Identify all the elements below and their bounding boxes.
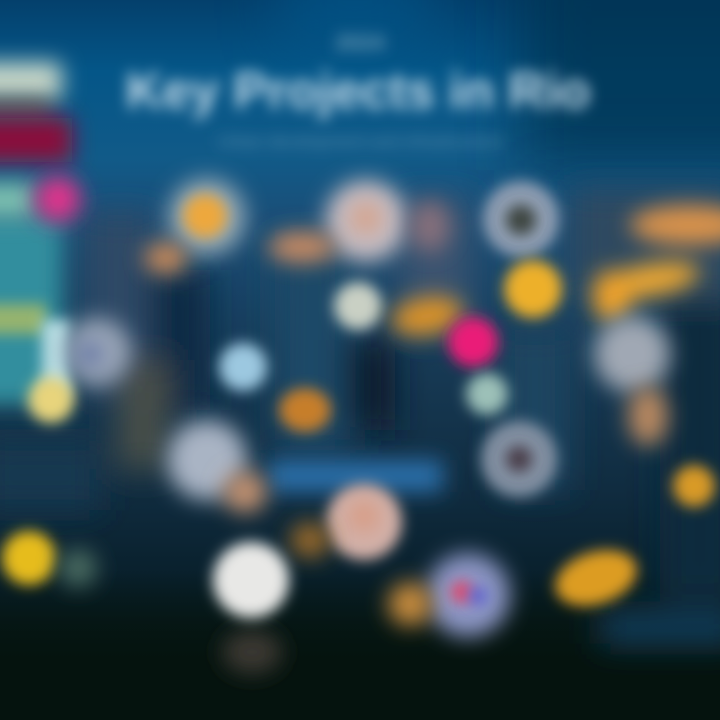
icon: orange small blob (279, 388, 331, 432)
icon: white glowing circle (213, 542, 289, 618)
tower green band (0, 304, 46, 334)
icon: multicolour badge (388, 553, 510, 637)
tower shaft (0, 215, 62, 405)
icon: magenta circle (448, 317, 498, 367)
dark shadow below white circle (222, 630, 282, 674)
tower neck (0, 100, 52, 118)
icon: dark ring badge (483, 181, 559, 257)
icon: pale teal circle (466, 373, 508, 415)
icon: yellow circle (28, 377, 74, 423)
icon: light blue circle (219, 343, 267, 391)
subtitle: Urban development and infrastructure (217, 132, 503, 151)
title: Key Projects in Rio (126, 62, 590, 119)
tower red band (0, 118, 72, 162)
tower teal collar (0, 182, 36, 218)
icon: gold ribbon lower right (548, 540, 644, 616)
icon: orange cluster top right (592, 205, 720, 322)
icon: grey ring (63, 318, 131, 386)
icon: dark ring badge lower (481, 421, 557, 497)
icon: orange badge with tail (144, 178, 246, 274)
icon: pale ring with peach tail (167, 420, 267, 513)
icon: gold small circle right (673, 465, 715, 507)
icon: small pale circle (334, 282, 382, 330)
heading (126, 30, 590, 151)
skyline: blurred buildings (0, 190, 720, 644)
tower at left (0, 62, 131, 423)
blue water band (268, 460, 443, 492)
small kicker above title: 2024 (336, 30, 385, 55)
tower top (0, 62, 62, 100)
icon: pink circle (35, 176, 81, 222)
icon: gold circle (504, 260, 562, 318)
icon: orange pill (388, 291, 466, 341)
tower light column (42, 320, 70, 396)
icon: peach badge with arm (268, 180, 450, 263)
icon: peach badge lower (290, 484, 402, 560)
icon: pale circle with orange tail (594, 316, 670, 446)
icon: yellow circle lower left (2, 531, 97, 587)
